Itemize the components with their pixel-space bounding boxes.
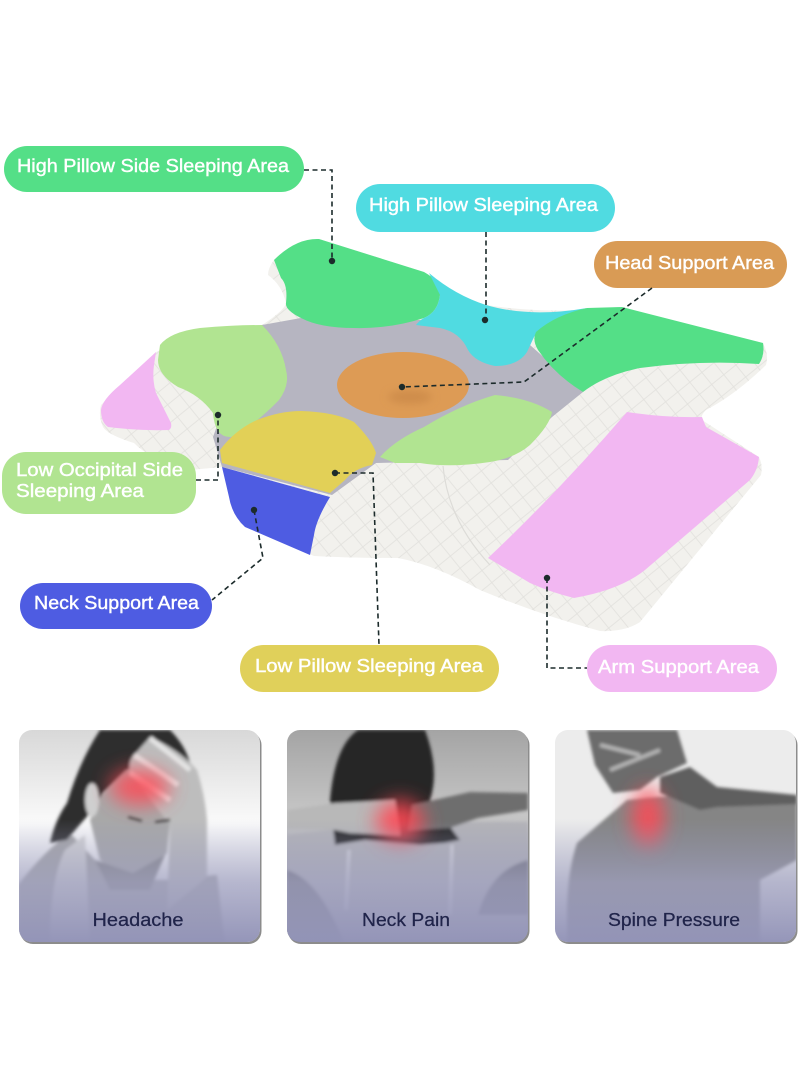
leader: low pillow <box>332 470 379 645</box>
pillow white body <box>100 239 767 631</box>
leader: head support <box>399 288 652 390</box>
leader: arm support <box>544 575 587 668</box>
pillow illustration <box>100 239 767 631</box>
label: neck support area <box>20 583 212 629</box>
zone: arm support, left <box>101 352 171 430</box>
label: high pillow sleeping area: High Pillow Sleeping Area <box>369 195 599 215</box>
label: neck support area: Neck Support Area <box>34 593 200 613</box>
zone: low occipital left <box>158 325 287 437</box>
zone: high pillow side sleeping, right <box>534 307 764 392</box>
label: arm support area: Arm Support Area <box>598 657 760 677</box>
label: arm support area <box>587 645 777 692</box>
zone: low pillow sleeping <box>220 411 376 493</box>
caption: Headache <box>92 910 184 930</box>
label: low pillow sleeping area <box>240 645 499 692</box>
zone: low occipital right <box>380 395 552 465</box>
card: headache <box>18 730 262 945</box>
zone: arm support, right <box>488 412 759 598</box>
zone: gray centre <box>213 318 583 495</box>
label: low occipital side sleeping area: Low Occipital Side <box>16 460 183 480</box>
label: high pillow side sleeping area <box>4 146 304 192</box>
caption: Neck Pain <box>362 910 450 930</box>
caption: Spine Pressure <box>608 910 740 930</box>
leader: high pillow sleeping <box>482 232 488 323</box>
label: high pillow side sleeping area: High Pillow Side Sleeping Area <box>17 156 290 176</box>
label: high pillow sleeping area <box>356 184 615 232</box>
leader: low occipital <box>196 412 221 480</box>
zone: head support <box>337 352 469 418</box>
leader: side sleeping top <box>304 170 335 264</box>
label: head support area <box>594 241 787 288</box>
zone: high pillow side sleeping, top <box>274 239 440 328</box>
card: spine pressure <box>555 730 798 945</box>
label: head support area: Head Support Area <box>605 253 775 273</box>
zone: neck support <box>222 467 330 555</box>
label: low occipital side sleeping area <box>2 452 196 514</box>
leader: neck support <box>212 507 263 600</box>
card: neck pain <box>287 730 530 945</box>
label: low occipital side sleeping area: Sleeping Area <box>16 481 145 501</box>
zone: high pillow sleeping <box>416 273 587 366</box>
label: low pillow sleeping area: Low Pillow Sleeping Area <box>255 656 484 676</box>
